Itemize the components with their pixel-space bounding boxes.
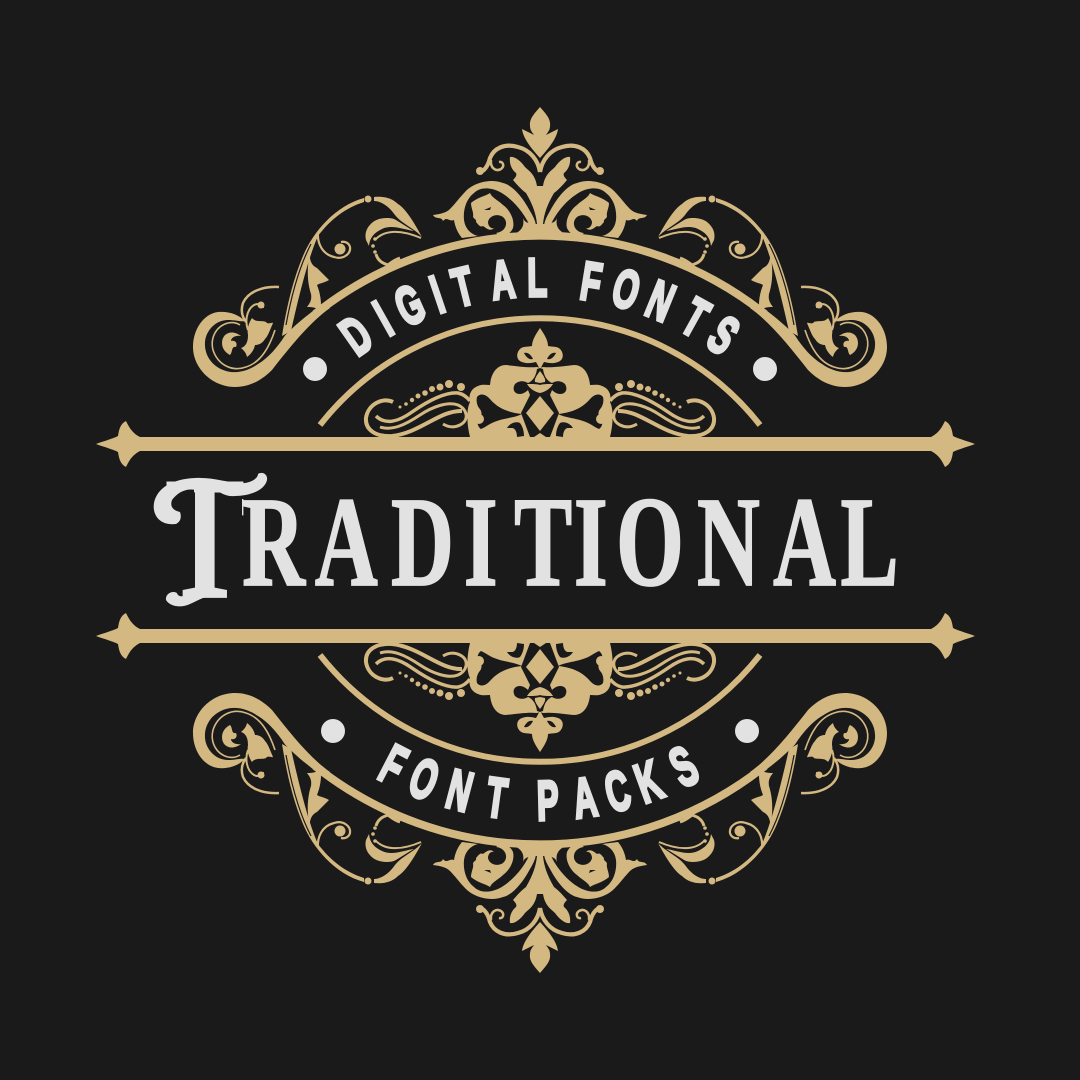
top curved text: T — [447, 257, 480, 319]
top curved text: O — [606, 258, 646, 322]
top curved text: I — [424, 266, 451, 325]
bottom curved text: F — [370, 733, 416, 798]
main title: RADITIONAL — [242, 470, 899, 613]
bottom divider bar with finials — [96, 613, 975, 659]
bottom curved text: A — [569, 765, 601, 830]
bottom curved text: C — [599, 758, 637, 825]
top curved text — [330, 249, 749, 367]
bottom ornament group — [193, 643, 887, 973]
bottom curved text — [370, 733, 708, 832]
bottom curved text: T — [483, 766, 511, 830]
bottom curved text: N — [440, 758, 479, 824]
title swash — [154, 473, 267, 524]
top curved text: G — [386, 274, 434, 338]
top curved text: I — [365, 291, 402, 347]
top divider bar with finials — [96, 421, 975, 467]
bottom curved text: S — [660, 734, 708, 800]
top curved text: A — [488, 250, 518, 312]
top curved text: D — [330, 305, 383, 367]
main title — [154, 443, 899, 636]
top curved text: F — [577, 252, 606, 313]
top curved text: N — [638, 270, 682, 334]
bullet dots — [303, 357, 777, 743]
top ornament group — [193, 107, 887, 437]
top curved text: S — [697, 305, 749, 366]
main title: T — [165, 443, 245, 636]
bottom curved text: O — [401, 746, 447, 813]
bottom curved text: P — [536, 769, 559, 832]
bottom curved text: K — [627, 749, 670, 815]
top curved text: L — [527, 249, 547, 308]
top curved text: T — [672, 288, 718, 349]
